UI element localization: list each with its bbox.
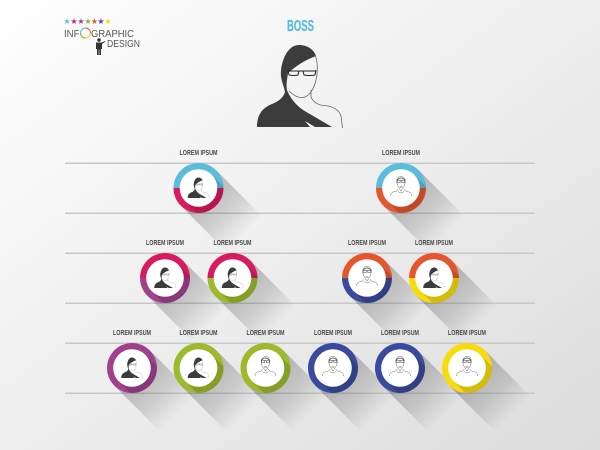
level 3 node: yellow man: LOREM IPSUM xyxy=(448,328,486,337)
level 1 node: blue orange man: LOREM IPSUM xyxy=(382,148,420,157)
level 2 node: orange yellow woman: LOREM IPSUM xyxy=(415,238,453,247)
level 1 node: blue crimson woman: LOREM IPSUM xyxy=(180,148,218,157)
level 2 node: orange yellow woman xyxy=(409,238,504,348)
logo stars: ★ xyxy=(63,17,71,26)
level 1 node: blue orange man xyxy=(376,148,471,258)
level 3 node: navy man two xyxy=(375,328,470,438)
level 3 node: green man xyxy=(240,328,336,438)
level 3 node: green man: LOREM IPSUM xyxy=(246,328,284,337)
level 2 node: crimson green woman xyxy=(208,238,303,348)
logo stars: ★ xyxy=(70,17,78,26)
level 2 node: crimson green woman: LOREM IPSUM xyxy=(214,238,252,247)
level 3 node: navy man two: LOREM IPSUM xyxy=(381,328,419,337)
level 2 node: crimson purple woman xyxy=(140,238,235,348)
logo wordmark xyxy=(64,28,134,40)
level 2 node: crimson purple woman: LOREM IPSUM xyxy=(146,238,184,247)
logo stars: ★ xyxy=(104,17,112,26)
logo stars: ★ xyxy=(91,17,98,26)
logo stars: ★ xyxy=(77,17,85,26)
level 1 node: blue crimson woman xyxy=(174,148,269,258)
logo presenter icon xyxy=(96,38,105,55)
level 3 node: green woman xyxy=(174,328,269,438)
logo: infographic design xyxy=(63,17,140,55)
logo stars: ★ xyxy=(97,17,105,26)
logo wordmark: GRAPHIC xyxy=(91,28,134,40)
level 3 node: yellow man xyxy=(442,328,537,438)
logo stars xyxy=(63,17,112,26)
level 3 node: navy man one xyxy=(308,328,403,438)
logo design word: DESIGN xyxy=(107,38,140,50)
level 2 node: orange navy man: LOREM IPSUM xyxy=(348,238,386,247)
level 3 node: purple woman: LOREM IPSUM xyxy=(113,328,151,337)
title: boss: BOSS xyxy=(287,18,314,35)
logo wordmark: INF xyxy=(64,28,80,40)
level 3 node: green woman: LOREM IPSUM xyxy=(180,328,218,337)
level 2 node: orange navy man xyxy=(342,238,437,348)
logo stars: ★ xyxy=(84,17,92,26)
level 3 node: navy man one: LOREM IPSUM xyxy=(314,328,352,337)
level 3 node: purple woman xyxy=(107,328,202,438)
logo ring xyxy=(80,28,90,38)
icon: boss portrait xyxy=(257,45,342,128)
